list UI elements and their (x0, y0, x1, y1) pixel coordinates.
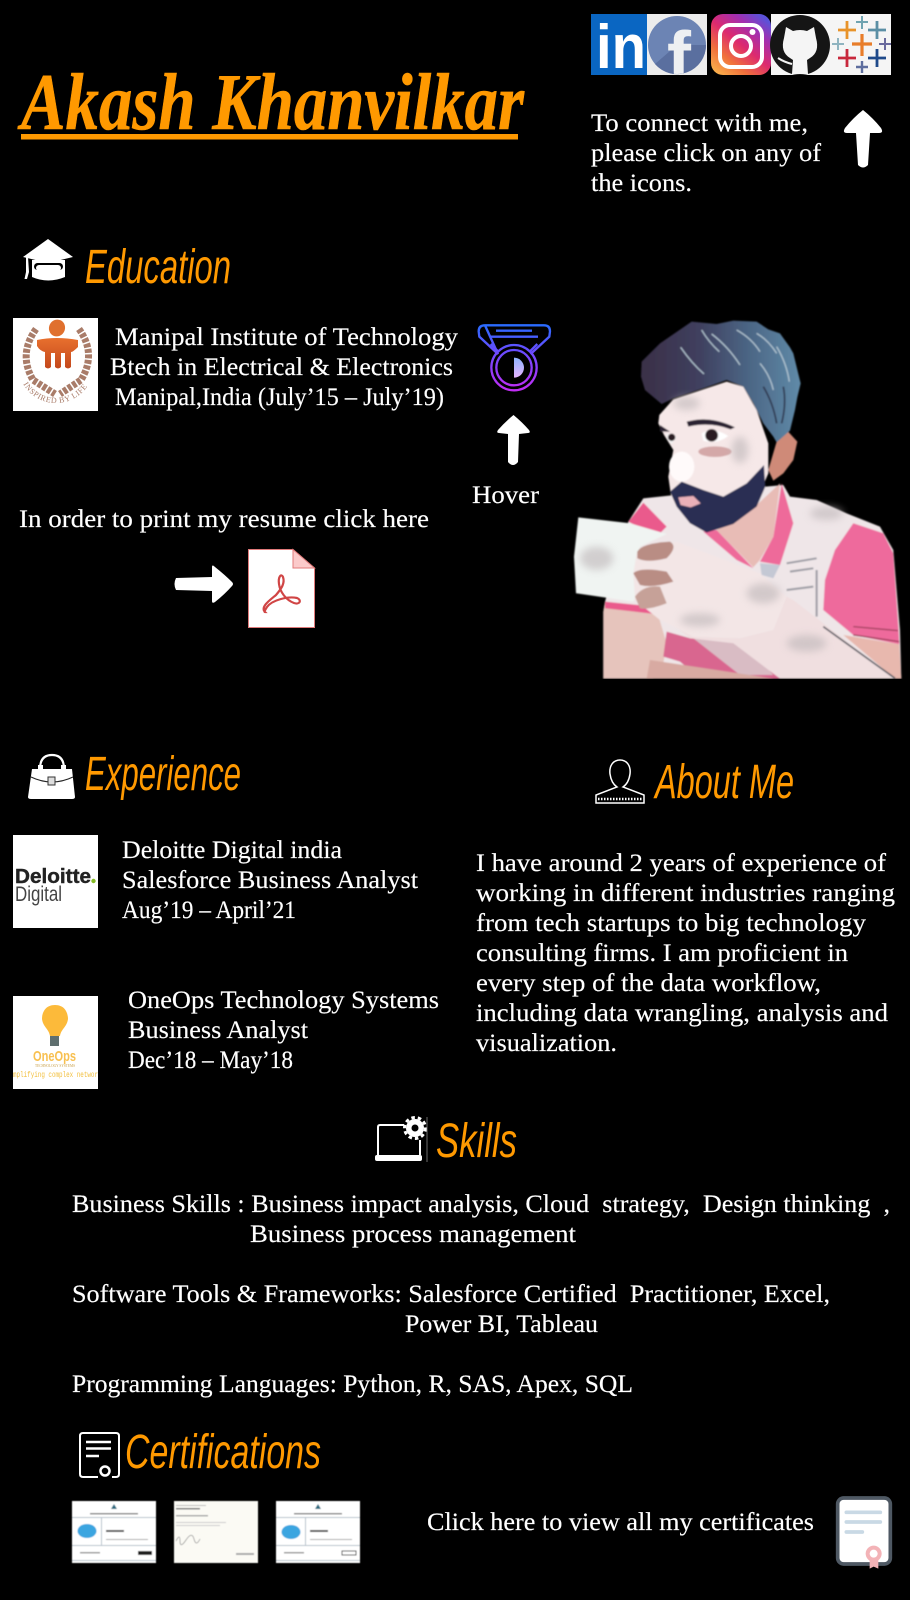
photo: portrait illustration (574, 321, 901, 679)
logo: deloitte digital: Deloitte (15, 866, 91, 888)
text: skills list: Programming Languages: Python, R, SAS, Apex, SQL (72, 1371, 633, 1398)
mug (574, 517, 667, 602)
text: education details: Manipal,India (July’15 – July’19) (115, 384, 444, 411)
text: oneops role: OneOps Technology Systems (128, 987, 439, 1014)
text: about me paragraph: visualization. (476, 1030, 617, 1057)
text: education details: Manipal Institute of Technology (115, 324, 459, 351)
certificate thumbnail three (276, 1501, 360, 1563)
text: deloitte role: Aug’19 – April’21 (122, 897, 296, 924)
icon: tableau (830, 14, 891, 75)
text: deloitte role: Salesforce Business Analyst (122, 867, 418, 894)
icon: person (596, 760, 644, 803)
text: about me paragraph (476, 850, 896, 1057)
text: about me paragraph: consulting firms. I am proficient in (476, 940, 849, 967)
icon: graduation cap (23, 239, 73, 280)
icon: facebook (647, 14, 707, 75)
logo: manipal institute: INSPIRED BY LIFE (23, 382, 87, 403)
icon: instagram (711, 14, 771, 75)
text: skills list (72, 1191, 890, 1398)
icon: github (770, 14, 830, 75)
right sleeve (823, 523, 899, 644)
panel: about me (476, 756, 896, 1057)
left arm (603, 602, 667, 679)
face (657, 380, 770, 496)
text: view certificates: Click here to view all my certificates (427, 1509, 814, 1536)
logo: deloitte digital (13, 835, 98, 928)
text: skills list: Business Skills : Business impact analysis, Cloud strategy, Design thinking , (72, 1191, 890, 1218)
arrow: up to medal (497, 415, 530, 465)
neck (717, 483, 780, 567)
icon: laptop and gear (375, 1117, 427, 1162)
text: connect note: the icons. (591, 170, 692, 197)
icon: facebook: f (667, 18, 692, 98)
text: deloitte role: Deloitte Digital india (122, 837, 342, 864)
heading: skills: Skills (436, 1115, 517, 1168)
title: name: Akash Khanvilkar (17, 59, 525, 147)
text: connect note: please click on any of (591, 140, 822, 167)
text: connect note (591, 110, 822, 197)
text: oneops role: Dec’18 – May’18 (128, 1047, 293, 1074)
panel: education (13, 239, 459, 411)
icon: linkedin: in (596, 13, 646, 82)
text: about me paragraph: from tech startups to big technology (476, 910, 867, 937)
text: connect note: To connect with me, (591, 110, 808, 137)
arrow: up to social icons (844, 110, 882, 168)
panel: skills (72, 1115, 890, 1398)
text: oneops role (128, 987, 439, 1074)
text: about me paragraph: including data wrangling, analysis and (476, 1000, 889, 1027)
icon: certificate outline (80, 1433, 119, 1477)
text: about me paragraph: working in different industries ranging (476, 880, 896, 907)
collar bands (703, 483, 793, 568)
panel: experience (13, 748, 439, 1089)
text: skills list: Software Tools & Frameworks: Salesforce Certified Practitioner, Excel, (72, 1281, 830, 1308)
ear (768, 430, 797, 481)
hair (641, 321, 801, 442)
icon: handbag (28, 755, 75, 799)
panel: certifications (72, 1426, 890, 1569)
certificate thumbnail two (174, 1501, 258, 1563)
brows and eyes (687, 419, 735, 429)
logo: deloitte digital: Digital (15, 883, 62, 906)
lower shirt (663, 632, 780, 679)
logo: oneops: TECHNOLOGY SYSTEMS (35, 1063, 75, 1068)
text: hover: Hover (472, 482, 540, 509)
hand (633, 542, 787, 638)
icon: certificate (838, 1498, 890, 1569)
text: skills list: Power BI, Tableau (405, 1311, 599, 1338)
text: print resume: In order to print my resume click here (19, 506, 429, 533)
left sleeve (605, 503, 667, 614)
icon: medal (479, 325, 550, 390)
text: deloitte role (122, 837, 418, 924)
text: about me paragraph: every step of the data workflow, (476, 970, 821, 997)
text: education details (110, 324, 459, 411)
forearm (691, 625, 894, 679)
certificate thumbnail one (72, 1501, 156, 1563)
text: oneops role: Business Analyst (128, 1017, 308, 1044)
fingers (637, 542, 673, 561)
heading: certifications: Certifications (125, 1426, 321, 1479)
logo: manipal institute (13, 318, 98, 411)
figure silhouette (603, 485, 901, 679)
icon: pdf (248, 550, 314, 628)
text: education details: Btech in Electrical & Electronics (110, 354, 453, 381)
mottled shading (580, 397, 843, 652)
text: skills list: Business process management (250, 1221, 576, 1248)
heading: experience: Experience (85, 748, 241, 801)
text: about me paragraph: I have around 2 years of experience of (476, 850, 887, 877)
beard (670, 465, 765, 533)
logo: oneops (13, 996, 98, 1089)
panel: social icons (591, 14, 891, 75)
logo: oneops: mplifying complex networ (13, 1071, 98, 1080)
logo: oneops: OneOps (33, 1048, 76, 1065)
arrow: right to pdf (174, 566, 233, 603)
heading: about me: About Me (653, 756, 794, 809)
heading: education: Education (85, 241, 231, 294)
